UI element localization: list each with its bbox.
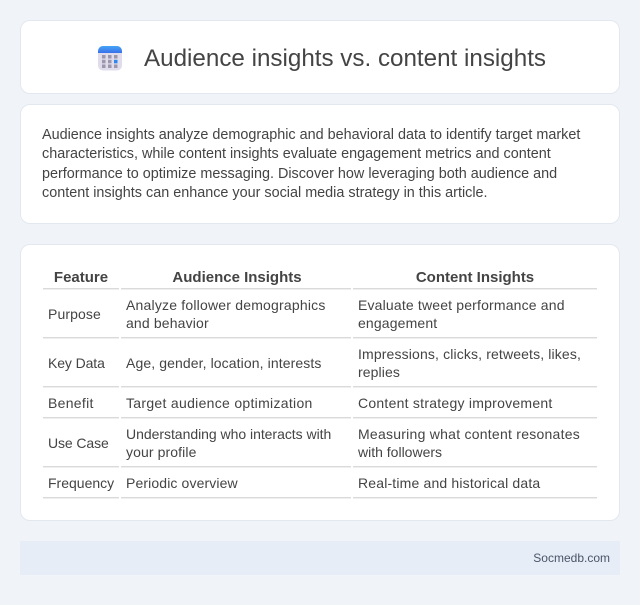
table row: purpose: Purpose — [48, 306, 101, 322]
panel: introduction — [20, 104, 620, 224]
table row: key data: Impressions, clicks, retweets, likes, — [358, 346, 581, 362]
text block: introduction: characteristics, while content insights evaluate engagement metrics and content — [42, 146, 551, 162]
text block: introduction: content insights can enhance your social media strategy in this article. — [42, 185, 488, 201]
table row: use case: Measuring what content resonates — [358, 426, 580, 442]
title: Audience insights vs. content insights — [144, 45, 546, 72]
panel: comparison table — [20, 244, 620, 521]
panel: title card — [20, 20, 620, 94]
table header: Content Insights — [416, 269, 534, 286]
table row: purpose: Analyze follower demographics — [126, 297, 326, 313]
table row: frequency: Frequency — [48, 475, 114, 491]
icon: calendar — [98, 46, 122, 70]
text block: introduction: performance to optimize messaging. Discover how leveraging both audience and — [42, 166, 557, 182]
table row: benefit: Target audience optimization — [126, 395, 313, 411]
table row: purpose: and behavior — [126, 315, 209, 331]
table row: key data — [48, 346, 581, 380]
table header: Audience Insights — [172, 269, 302, 286]
table row: frequency: Periodic overview — [126, 475, 238, 491]
text block: introduction — [42, 127, 580, 201]
table header: Feature — [54, 269, 108, 286]
table row: purpose: Evaluate tweet performance and — [358, 297, 565, 313]
text block: introduction: Audience insights analyze demographic and behavioral data to identify target market — [42, 127, 580, 143]
table row: key data: Key Data — [48, 355, 105, 371]
table row: benefit: Benefit — [48, 395, 94, 411]
table row: frequency — [48, 475, 540, 491]
table row: use case: Understanding who interacts with — [126, 426, 331, 442]
table row: purpose — [48, 297, 565, 331]
table row: purpose: engagement — [358, 315, 437, 331]
table header — [54, 269, 534, 286]
table row: benefit: Content strategy improvement — [358, 395, 553, 411]
table row: use case — [48, 426, 580, 460]
table row: frequency: Real-time and historical data — [358, 475, 540, 491]
table row: use case: with followers — [358, 444, 442, 460]
table row: key data: replies — [358, 364, 400, 380]
table row: key data: Age, gender, location, interests — [126, 355, 321, 371]
table row: benefit — [48, 395, 553, 411]
footer bar — [20, 541, 620, 575]
footer source text: Socmedb.com — [533, 551, 610, 565]
table row: use case: Use Case — [48, 435, 109, 451]
table row: use case: your profile — [126, 444, 196, 460]
